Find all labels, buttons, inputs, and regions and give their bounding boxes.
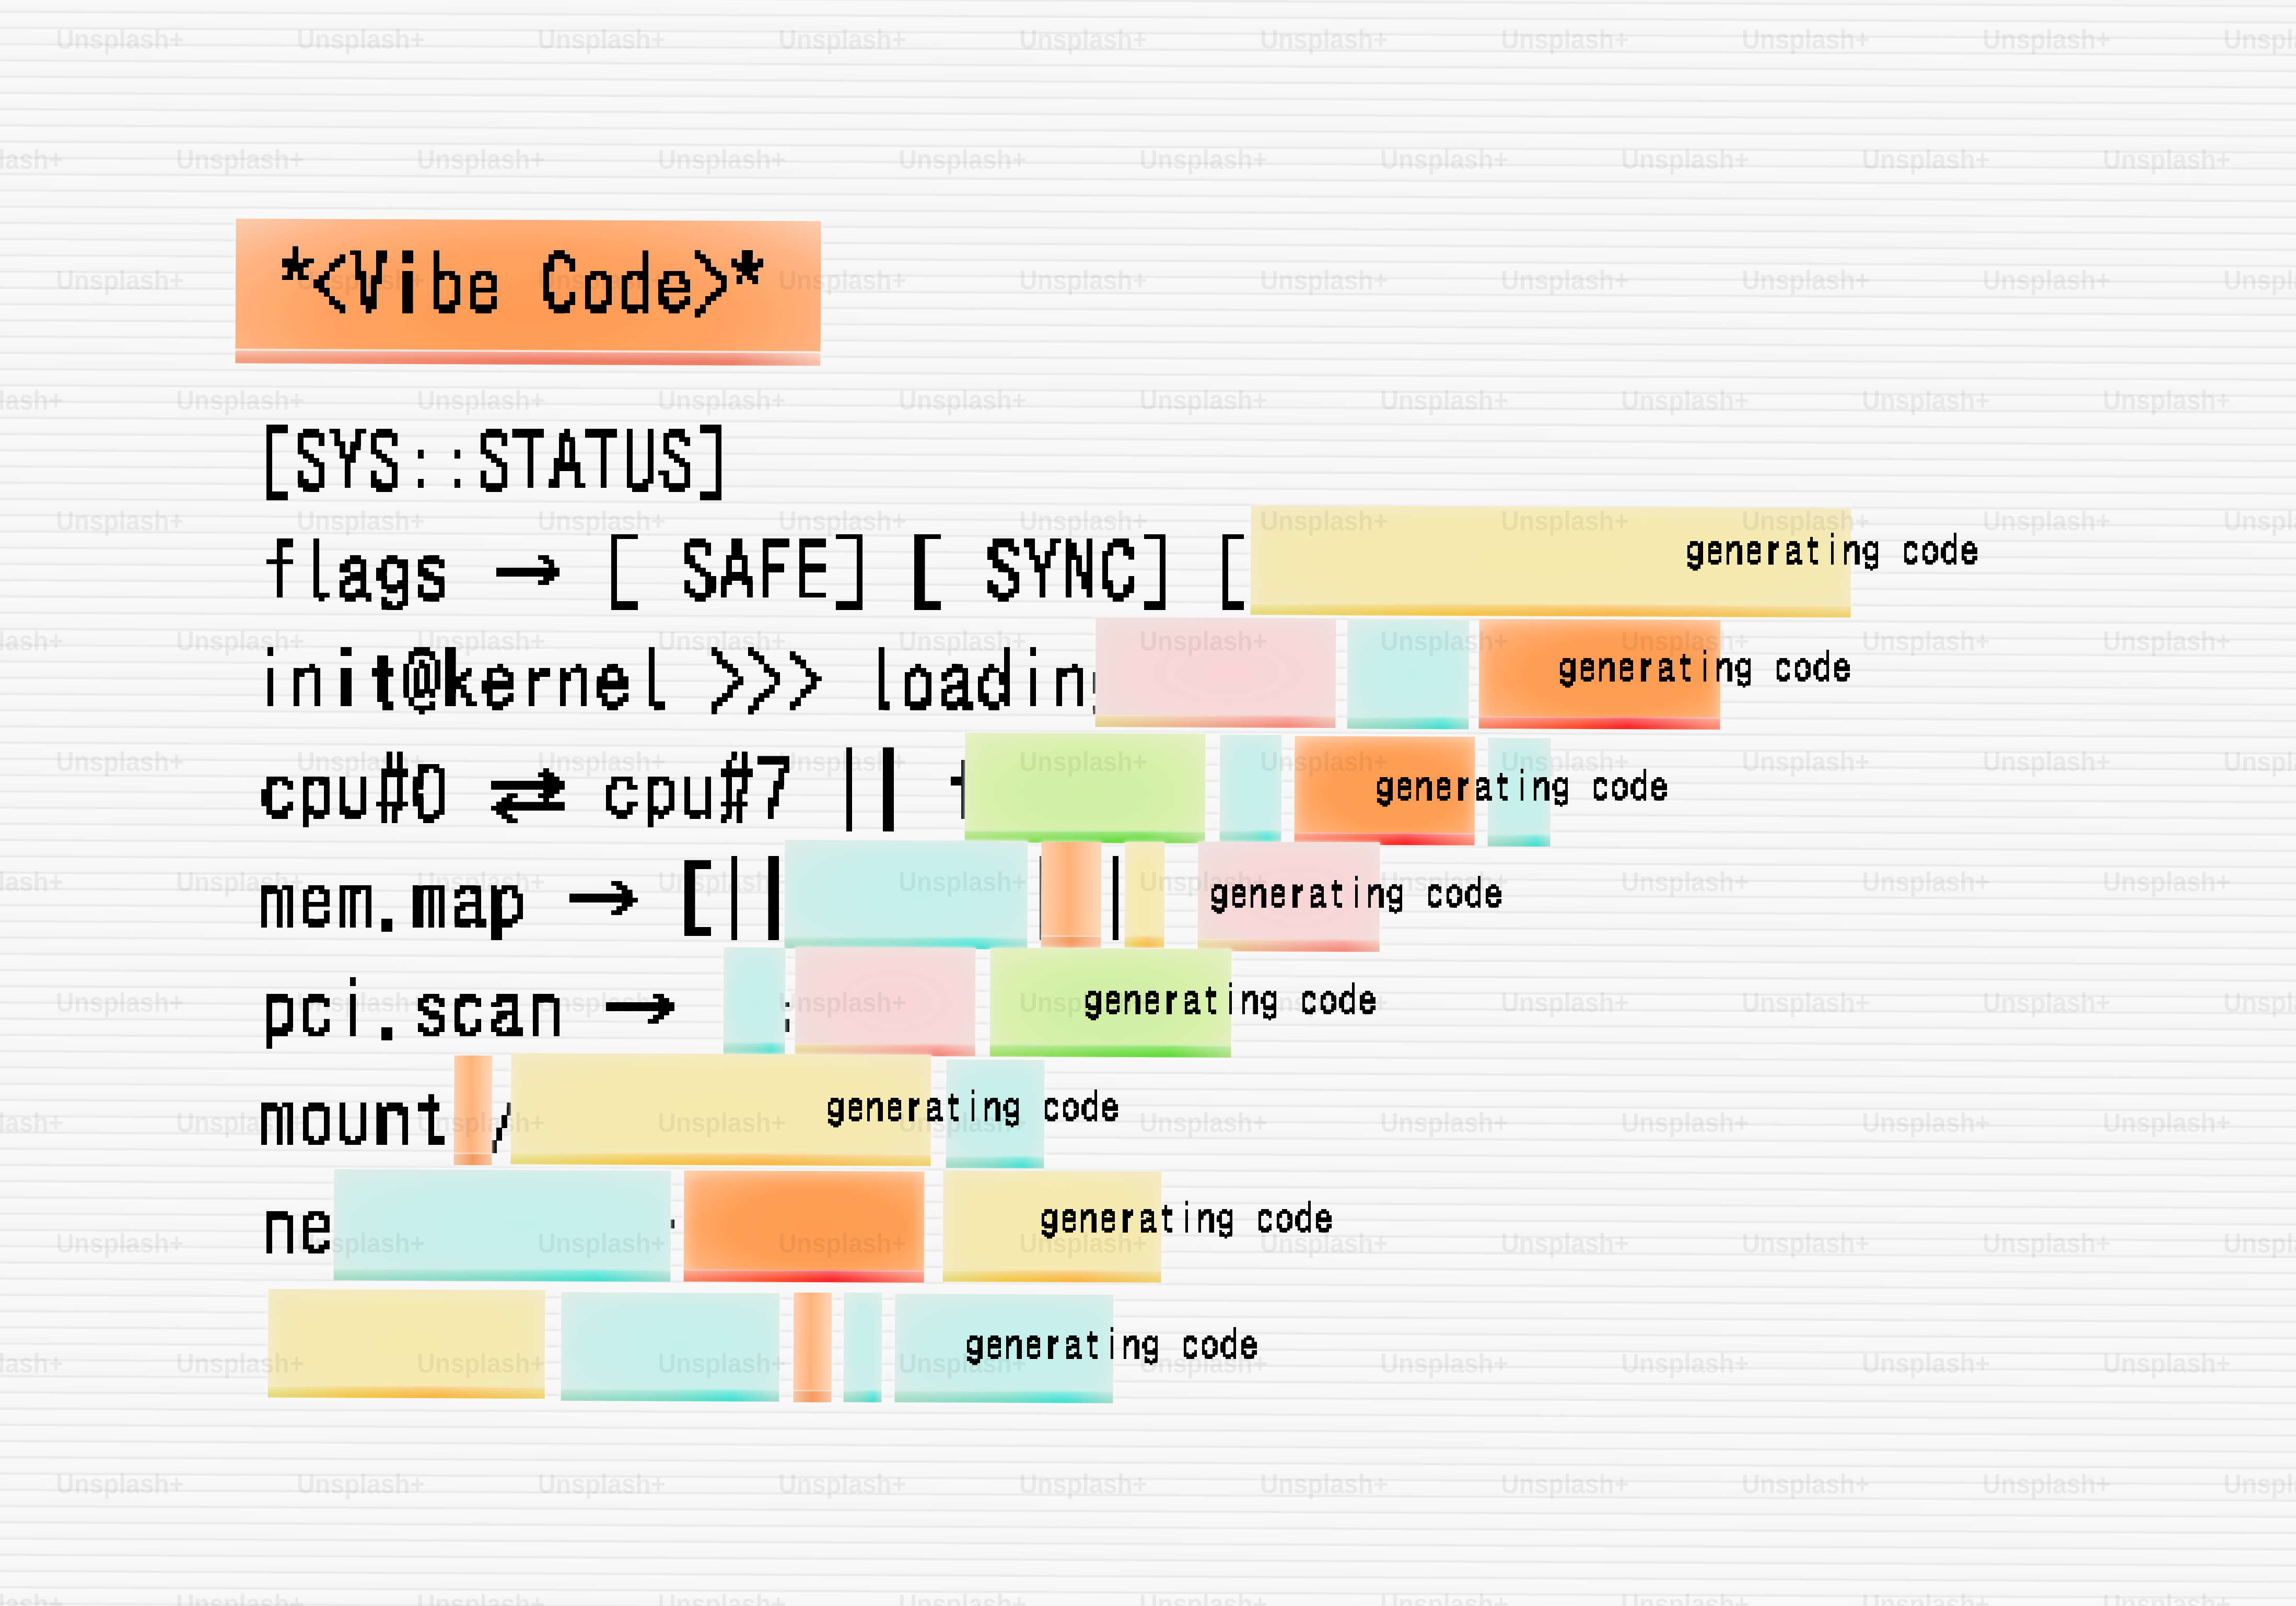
row 5 block: pink bbox=[795, 947, 975, 1057]
row 3 block: green bbox=[965, 733, 1205, 843]
row 5 block: green bbox=[990, 948, 1231, 1058]
label row 6: generating code bbox=[826, 1085, 1120, 1127]
cpu line: 0 bbox=[412, 746, 449, 838]
row 4 block: pink bbox=[1198, 841, 1380, 952]
row 6 block: cyan bbox=[946, 1060, 1044, 1168]
row 5 block: cyan narrow bbox=[724, 947, 785, 1054]
label row 8: generating code bbox=[965, 1322, 1258, 1365]
network line: net.link → bbox=[259, 1184, 679, 1267]
row 8 block: grey-cyan sliver bbox=[844, 1293, 882, 1402]
row 7 block: yellow bbox=[943, 1170, 1161, 1283]
flags line: flags → [ SAFE] [ SYNC] [ bbox=[260, 530, 1252, 613]
row 3 block: cyan narrow bbox=[1220, 735, 1281, 842]
cpu line: cpu#7 || f bbox=[602, 747, 984, 831]
cpu line bbox=[259, 746, 984, 838]
row 8 block: yellow bbox=[268, 1289, 545, 1399]
row 8 block: cyan bbox=[561, 1292, 779, 1402]
label row 4: generating code bbox=[1209, 871, 1503, 913]
title text: * bbox=[268, 239, 324, 346]
title text bbox=[268, 239, 775, 348]
title badge bottom lip bbox=[235, 349, 821, 366]
pci scan line: pci.scan → s bbox=[259, 967, 793, 1049]
row 6 block: yellow bbox=[511, 1053, 931, 1166]
row 4 block: yellow narrow bbox=[1125, 842, 1164, 948]
row 4 block: cyan bbox=[785, 840, 1028, 949]
label row 3: generating code bbox=[1375, 764, 1669, 806]
title text: <Vibe Code> bbox=[312, 243, 731, 325]
title badge bbox=[235, 219, 821, 366]
row 7 block: cyan bbox=[334, 1169, 671, 1282]
row 7 block: orange bbox=[684, 1170, 924, 1283]
row 8 block: orange sliver bbox=[794, 1293, 832, 1402]
row 2 block: pink bbox=[1095, 617, 1336, 728]
label row 5: generating code bbox=[1083, 978, 1377, 1020]
title text: * bbox=[719, 242, 775, 348]
label row 1: generating code bbox=[1685, 528, 1979, 570]
row 6 block: orange sliver bbox=[454, 1056, 492, 1165]
row 2 block: cyan bbox=[1347, 619, 1469, 730]
cpu line: ⇄ bbox=[488, 750, 568, 838]
init line: init@kernel >>> loading...... bbox=[251, 639, 1357, 722]
row 3 block: orange bbox=[1295, 736, 1475, 846]
row 8 block: cyan end bbox=[895, 1294, 1113, 1403]
status heading: [SYS::STATUS] bbox=[257, 420, 730, 503]
row 1 block: yellow bbox=[1251, 505, 1851, 618]
row 2 block: orange bbox=[1479, 619, 1720, 730]
label row 2: generating code bbox=[1558, 645, 1851, 687]
cpu line: cpu# bbox=[259, 748, 412, 831]
row 4 block: orange narrow bbox=[1041, 842, 1101, 948]
mount line: mount /dev/nvme0n| bbox=[259, 1074, 946, 1158]
memory map line: mem.map → [||||||||||| bbox=[259, 857, 1136, 940]
row 3 block: cyan narrow end bbox=[1488, 738, 1551, 847]
label row 7: generating code bbox=[1040, 1196, 1333, 1238]
